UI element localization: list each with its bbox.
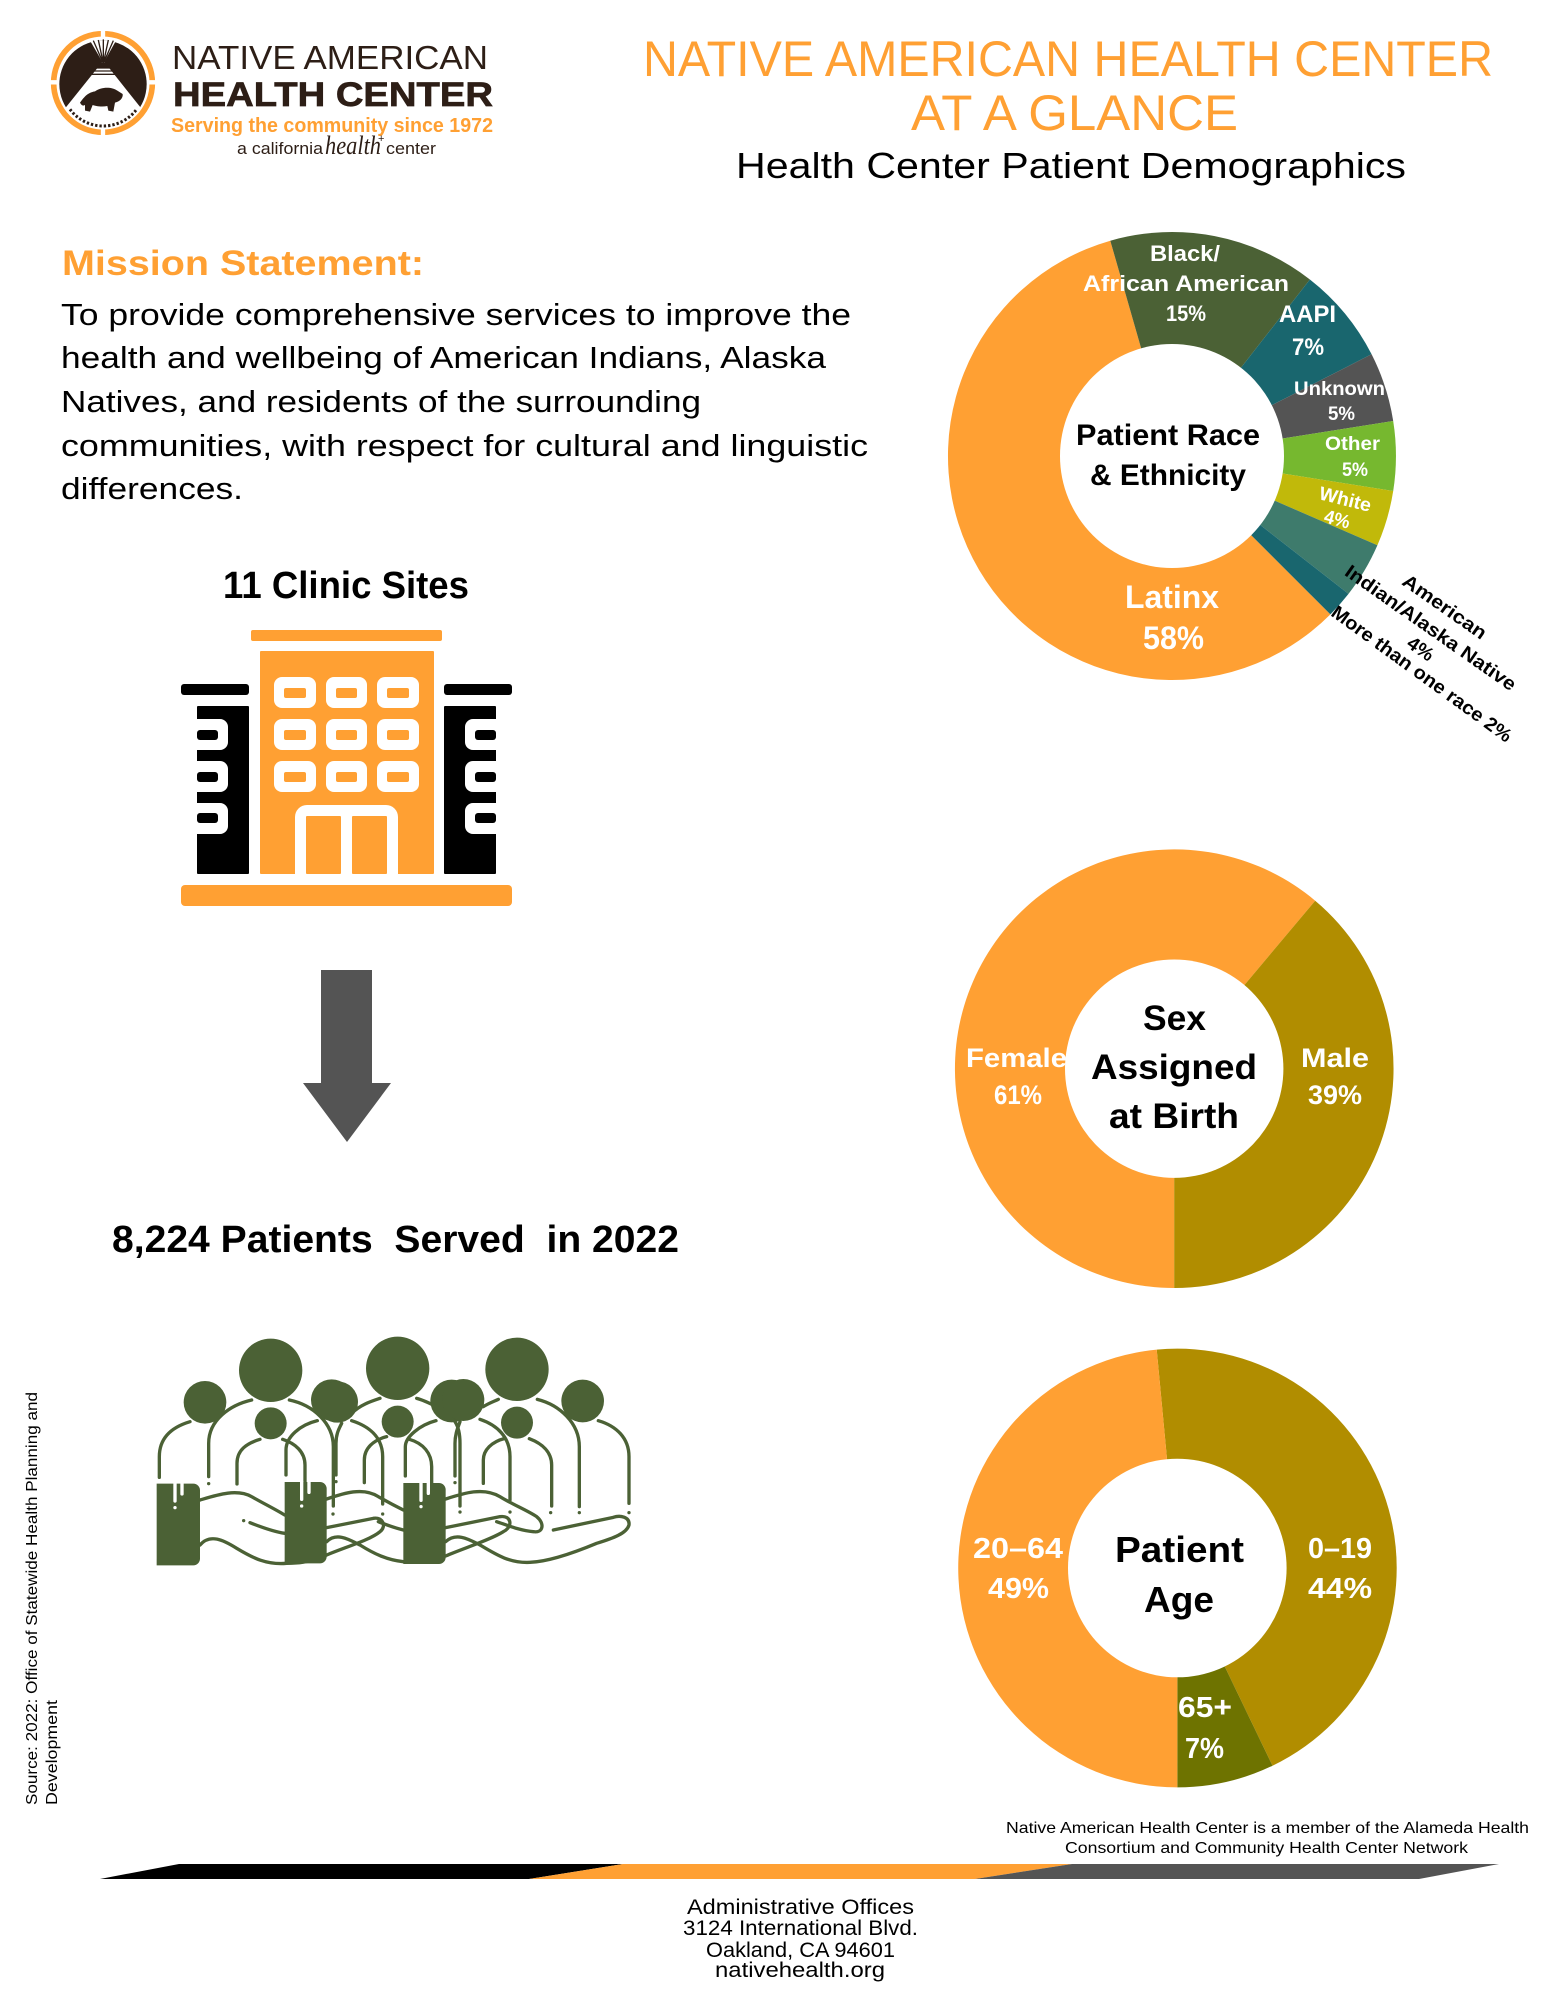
chart center label: Assigned	[1091, 1048, 1257, 1087]
chart center label	[1091, 999, 1257, 1136]
source note: Development	[44, 1699, 61, 1805]
title	[643, 31, 1493, 141]
footer address: Administrative Offices	[687, 1896, 914, 1919]
text block: mission statement: Natives, and residents of the surrounding	[61, 384, 701, 419]
slice labels: 15%	[1166, 301, 1206, 326]
chart center label: Patient	[1115, 1529, 1244, 1570]
slice labels: Latinx	[1125, 579, 1219, 615]
slice labels: Female	[966, 1043, 1067, 1073]
title: NATIVE AMERICAN HEALTH CENTER	[643, 31, 1493, 87]
slice labels: 44%	[1308, 1573, 1372, 1605]
donut chart: patient race and ethnicity	[948, 232, 1520, 747]
footer address: Oakland, CA 94601	[706, 1939, 895, 1962]
network membership note: Native American Health Center is a member of the Alameda Health	[1006, 1820, 1529, 1837]
slice labels	[966, 1043, 1369, 1110]
slice labels: 5%	[1328, 404, 1355, 425]
slice labels: 5%	[1342, 460, 1368, 481]
icon: people and supporting hands	[157, 1337, 631, 1565]
text block: mission statement: communities, with respect for cultural and linguistic	[61, 428, 868, 463]
heading: patients served: 8,224 Patients Served in 2022	[112, 1219, 679, 1261]
text block: mission statement: To provide comprehensive services to improve the	[61, 297, 851, 332]
logo: Native American Health Center	[48, 28, 493, 160]
slice labels: 4%	[1322, 507, 1352, 534]
subtitle: Health Center Patient Demographics	[736, 145, 1406, 186]
chart center label	[1076, 419, 1260, 492]
slice labels: 49%	[988, 1573, 1049, 1605]
slice labels: 58%	[1143, 620, 1204, 656]
logo sub-tagline: +	[378, 133, 384, 145]
chart center label: Sex	[1143, 999, 1207, 1038]
source note	[24, 1392, 61, 1805]
slice labels: 65+	[1178, 1692, 1232, 1724]
chart center label: & Ethnicity	[1090, 459, 1246, 492]
logo sub-tagline: health	[325, 131, 381, 160]
network membership note	[1006, 1820, 1529, 1857]
network membership note: Consortium and Community Health Center Network	[1065, 1840, 1469, 1857]
slice labels	[1083, 241, 1385, 656]
donut chart: patient age	[958, 1349, 1397, 1787]
icon: clinic building	[181, 630, 512, 906]
footer address: 3124 International Blvd.	[683, 1917, 918, 1940]
arrow: down	[303, 970, 391, 1142]
slice labels	[973, 1533, 1372, 1765]
footer address: nativehealth.org	[715, 1959, 885, 1982]
slice labels: 7%	[1292, 334, 1324, 361]
heading: clinic sites: 11 Clinic Sites	[223, 565, 469, 607]
slice labels: 20–64	[973, 1533, 1063, 1565]
icon: tipi and buffalo emblem	[48, 28, 158, 138]
slice labels: 61%	[994, 1080, 1042, 1110]
rotated outside labels: Indian/Alaska Native	[1341, 561, 1520, 696]
slice labels: Male	[1301, 1043, 1369, 1073]
rotated outside labels	[1327, 561, 1520, 747]
slice labels: Other	[1325, 434, 1381, 455]
logo sub-tagline: center	[386, 139, 436, 158]
footer address	[683, 1896, 918, 1982]
text block: mission statement	[61, 297, 868, 506]
source note: Source: 2022: Office of Statewide Health Planning and	[24, 1392, 41, 1805]
text block: mission statement: health and wellbeing of American Indians, Alaska	[61, 340, 827, 375]
rotated outside labels: 4%	[1403, 633, 1438, 666]
slice labels: AAPI	[1279, 301, 1336, 328]
logo tagline: Serving the community since 1972	[171, 115, 493, 137]
logo wordmark line 2: HEALTH CENTER	[173, 76, 493, 114]
logo sub-tagline	[237, 131, 436, 160]
text block: mission statement: differences.	[61, 471, 243, 506]
slice labels: Black/	[1150, 241, 1220, 266]
logo wordmark line 1: NATIVE AMERICAN	[172, 39, 488, 76]
footer tricolor bar	[100, 1864, 1499, 1879]
slice labels: 39%	[1308, 1080, 1362, 1110]
logo sub-tagline: a california	[237, 139, 324, 158]
heading: mission statement: Mission Statement:	[62, 244, 424, 283]
chart center label	[1115, 1529, 1244, 1620]
chart center label: Age	[1144, 1579, 1214, 1620]
chart center label: Patient Race	[1076, 419, 1260, 452]
slice labels: 7%	[1185, 1733, 1224, 1765]
donut chart: sex assigned at birth	[955, 849, 1394, 1288]
slice labels: African American	[1083, 271, 1289, 296]
rotated outside labels: American	[1398, 571, 1490, 644]
chart center label: at Birth	[1109, 1097, 1239, 1136]
slice labels: Unknown	[1294, 379, 1385, 400]
title: AT A GLANCE	[911, 85, 1238, 141]
slice labels: White	[1317, 483, 1373, 517]
rotated outside labels: More than one race 2%	[1327, 602, 1516, 747]
slice labels: 0–19	[1308, 1533, 1372, 1565]
